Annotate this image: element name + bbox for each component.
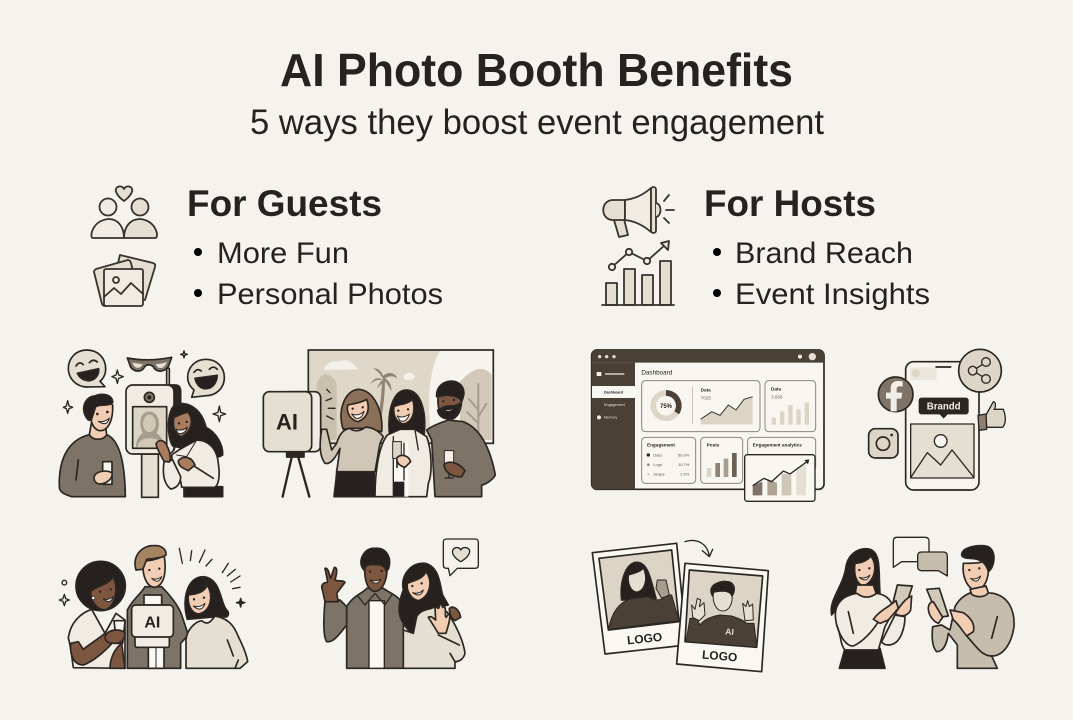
card: donut and area chart: Data	[701, 388, 711, 393]
icon: heart bubble	[443, 539, 478, 576]
card: bar chart data	[765, 381, 816, 432]
illustration: branded polaroid photos	[592, 540, 768, 672]
icon: sparkles	[63, 351, 226, 422]
person: man with drink	[59, 394, 125, 497]
panel: for hosts	[602, 183, 930, 311]
sidebar labels: Engagement	[604, 403, 625, 407]
icon: facebook	[878, 377, 913, 412]
icon: laughing emoji bubbles	[68, 350, 224, 397]
illustration: analytics dashboard	[592, 350, 824, 501]
label: AI: AI	[276, 409, 298, 434]
photo booth	[126, 368, 181, 497]
person: man behind sign	[127, 546, 188, 668]
person: man with peace sign	[322, 548, 403, 668]
decorations	[59, 548, 245, 607]
person: woman in taupe	[320, 389, 383, 497]
label: brand tag	[919, 398, 969, 419]
card: bar chart data: Data	[771, 386, 782, 391]
polaroid: woman: LOGO	[626, 630, 663, 647]
card: engagement legend: 10.7%	[678, 462, 690, 467]
icon: photo stack	[94, 255, 155, 306]
AI booth	[263, 392, 321, 497]
icon: growth chart	[602, 241, 674, 305]
AI sign	[132, 605, 173, 668]
card: bar chart data: 3,666	[771, 395, 783, 400]
person: man with phone	[927, 546, 1014, 668]
sidebar labels	[597, 390, 625, 420]
illustration: social sharing phone	[869, 349, 1005, 490]
icon: thumbs up	[978, 402, 1005, 430]
chat bubbles	[893, 537, 947, 576]
card: engagement legend: Data	[653, 452, 663, 457]
card: posts: Posts	[707, 443, 720, 448]
illustration: guests at photo booth	[59, 350, 226, 497]
polaroid: man with AI shirt: AI	[725, 626, 734, 637]
list: host benefits	[713, 237, 930, 311]
dashboard window	[592, 350, 824, 489]
flash lines	[326, 389, 335, 419]
phone	[906, 362, 979, 490]
person: woman waving	[399, 563, 465, 668]
illustration: couple waving	[322, 539, 478, 668]
card: donut and area chart	[642, 381, 760, 432]
list: guest benefits: Personal Photos	[217, 278, 443, 311]
title: AI Photo Booth Benefits	[280, 44, 793, 96]
card: engagement legend: 50.0%	[678, 452, 690, 457]
card: donut and area chart: 75%	[660, 404, 673, 410]
sidebar labels: Memory	[604, 416, 617, 420]
overlay growth chart	[745, 455, 815, 501]
card: engagement legend: Logo	[653, 462, 663, 467]
illustration: guests with AI booth and backdrop	[263, 350, 495, 497]
card: posts	[701, 437, 743, 483]
person: woman in blazer	[375, 390, 431, 497]
card: engagement analytics	[748, 437, 816, 471]
person: woman in sweater	[185, 577, 248, 668]
person: man with beard	[427, 381, 495, 497]
list: host benefits: Event Insights	[735, 278, 930, 311]
label: brand tag: Brandd	[927, 401, 961, 412]
icon: curved arrow	[685, 540, 713, 557]
illustration: guests around AI sign	[59, 546, 248, 668]
prop: glasses	[127, 357, 172, 371]
panel: for guests	[91, 183, 443, 311]
card: engagement legend	[642, 437, 696, 483]
subtitle: 5 ways they boost event engagement	[250, 103, 824, 142]
person: woman with afro	[68, 561, 125, 668]
icon: megaphone	[603, 187, 674, 237]
illustration: two people sharing on phones	[831, 537, 1014, 668]
card: engagement legend: 2.5%	[680, 472, 690, 477]
icon: share	[959, 349, 1001, 392]
list: guest benefits: More Fun	[217, 237, 349, 270]
list: host benefits: Brand Reach	[735, 237, 913, 270]
backdrop: palm scene	[308, 350, 493, 443]
AI sign: AI	[144, 614, 160, 631]
heading: for hosts: For Hosts	[704, 183, 876, 224]
sidebar labels: Dashboard	[604, 390, 623, 394]
polaroid: man with AI shirt: LOGO	[701, 648, 738, 665]
icon: two people with heart	[91, 186, 157, 238]
card: donut and area chart: 7025	[701, 396, 711, 401]
heading: dashboard: Dashboard	[641, 370, 673, 377]
polaroid: man with AI shirt	[677, 563, 768, 672]
polaroid: woman	[592, 543, 687, 654]
card: engagement legend: Engagement	[647, 443, 675, 448]
card: engagement legend: Snaps	[653, 472, 665, 477]
card: engagement analytics: Engagement analytics	[753, 443, 802, 448]
list: guest benefits	[194, 237, 443, 311]
icon: instagram	[869, 429, 898, 458]
heading: for guests: For Guests	[187, 183, 382, 224]
person: woman with phone	[831, 549, 912, 668]
person: woman waving	[156, 404, 223, 497]
